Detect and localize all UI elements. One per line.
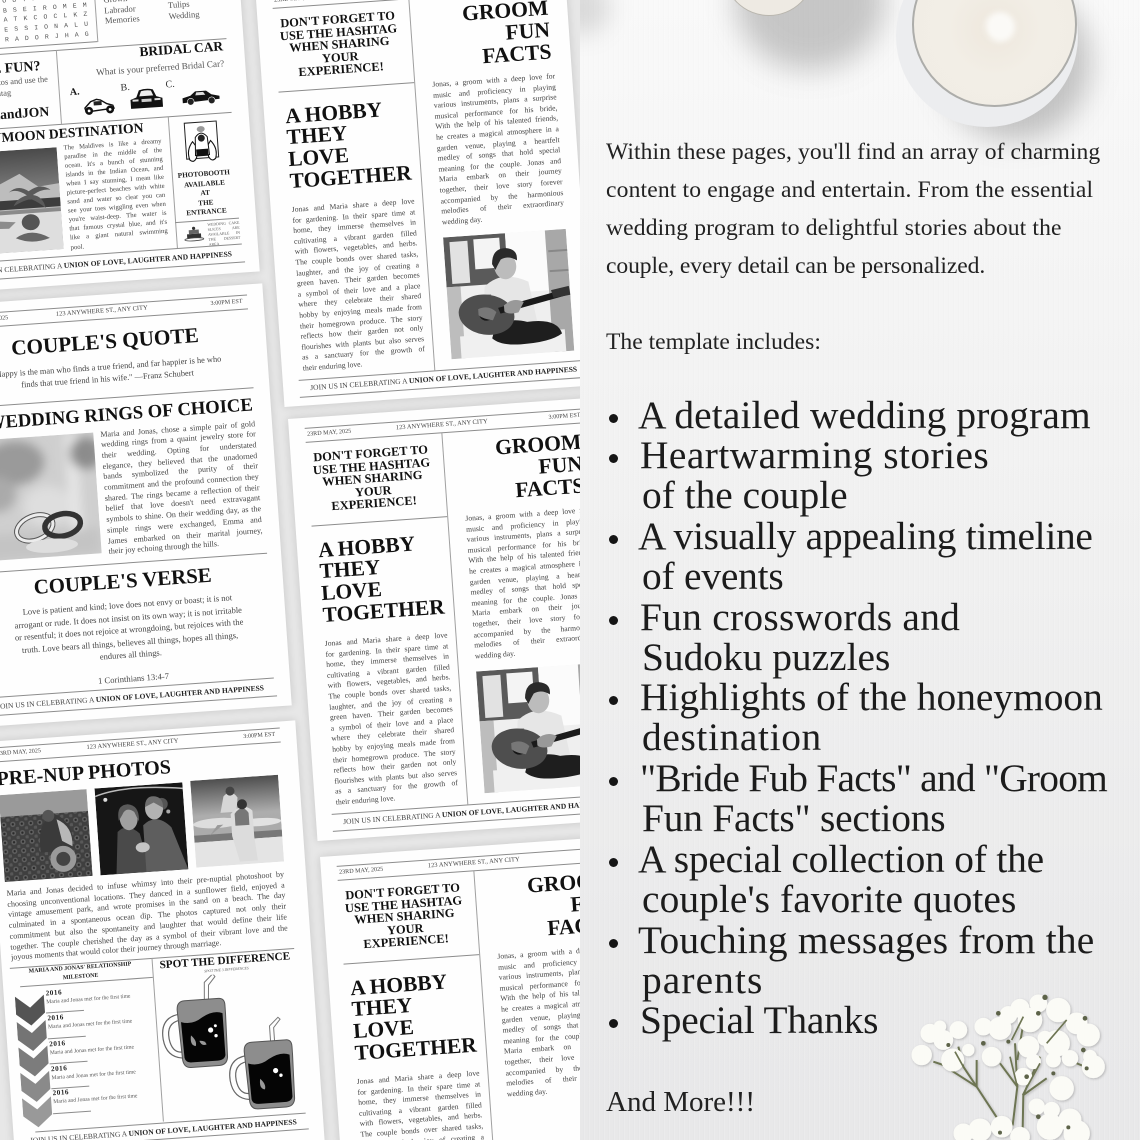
hobby paragraph: a symbol of their love and a place [330,715,454,733]
footer line: JOIN US IN CELEBRATING A UNION OF LOVE, LAUGHTER AND HAPPINESS [0,683,264,710]
bullet list of template contents: A special collection of the [638,837,1044,881]
icon: right candle glass [896,0,1078,127]
wedding cake note [207,220,240,247]
groom fun facts heading: FACTS [481,39,552,68]
milestone text 1: Maria and Jonas met for the first time [46,994,131,1005]
milestone text 4: Maria and Jonas met for the first time [51,1069,136,1081]
icon: wedding cake [184,226,204,242]
bullet list of template contents: Fun Facts" sections [642,796,945,840]
honeymoon description: sand and water so clear you can [67,192,165,206]
a hobby heading: A HOBBY [317,531,416,562]
relationship timeline [14,988,138,1128]
groom fun facts heading: FACTS [514,473,585,502]
groom paragraph: garden venue, playing a heartfelt [436,135,560,152]
shadow: top-left blur [555,0,610,35]
bullet list of template contents: of the couple [642,473,848,517]
chevron arrow stack [14,994,52,1128]
hashtag reminder: EXPERIENCE! [298,60,384,80]
hashtag reminder: WHEN SHARING [322,468,423,489]
milestone year 5: 2016 [52,1088,69,1097]
hobby paragraph: with flowers, vegetables, and herbs. [359,1111,483,1128]
bridal car question: What is your preferred Bridal Car? [96,58,225,77]
pre-nup story: culminated in a spontaneous ocean dip. The photos captured not only their [9,902,286,930]
rings description: their wedding. Opting for understated [102,440,257,460]
intro paragraph: content to engage and entertain. From the essential [606,177,1093,203]
photobooth text: AVAILABLE [184,178,225,189]
a hobby heading: TOGETHER [322,594,445,627]
honeymoon description: pool. [70,243,84,251]
icon: modern sedan [130,88,163,109]
hobby paragraph: their enduring love. [303,359,363,372]
a hobby heading: THEY [351,993,413,1021]
rings description: bands symbolized the purity of their [103,461,258,481]
panel: couple's quote page [0,283,292,727]
hobby paragraph: for gardening. In their spare time at [292,207,416,225]
verse text: truth. Love bears all things, believes all things, hopes all things, [21,629,238,655]
bullet list of template contents: Highlights of the honeymoon [640,675,1103,719]
header address: 123 ANYWHERE ST., ANY CITY [428,856,520,869]
rings description: commitment and the profound connection they [104,472,259,492]
hashtag reminder: DON'T FORGET TO [345,880,460,902]
rings description: symbols to shine. On their wedding day, as the [106,504,261,524]
wedding cake note: AREA [209,242,220,247]
hobby paragraph: their homegrown produce. The story [333,747,456,764]
groom paragraph: accompanied by the harmonious [440,188,564,205]
header time: 3:00PM EST [243,732,275,740]
pre-nup story: Maria and Jonas decided to infuse whimsy into their pre-nuptial photoshoot by [6,870,284,898]
hashtag reminder: DON'T FORGET TO [280,8,395,30]
wedding cake note: THE DESSERT [208,236,240,242]
hashtag reminder [312,442,430,514]
hobby paragraph: cultivating a vibrant garden filled [327,662,450,680]
word list column two: Wedding [168,8,200,21]
verse text [14,592,244,662]
hobby paragraph: reflects how their garden not only [333,757,457,775]
groom paragraph [432,71,564,226]
hobby paragraph: laughter, and the joy of creating a [329,694,452,711]
groom paragraph: wedding day. [507,1086,548,1098]
bridal car heading: BRIDAL CAR [139,38,223,59]
header address: 123 ANYWHERE ST., ANY CITY [86,738,179,751]
pre-nup story: together. The couple cherished the day as a symbol of their vibrant love and the [10,923,288,951]
hobby paragraph: home, they immerse themselves in [326,652,449,669]
closing line: And More!!! [606,1086,755,1118]
intro paragraph [606,137,1106,287]
hashtag reminder: USE THE HASHTAG [312,455,430,477]
milestone year 2: 2016 [47,1013,64,1022]
verse text: endures all things. [99,647,162,662]
wedding cake note: WEDDING CAKE [207,220,239,226]
rings description: shared. The rings became a reflection of their [105,483,260,503]
honeymoon description: when I say stunning, I mean like [66,174,164,188]
quote text: finds that true friend in his wife." —Franz Schubert [21,368,194,389]
hobby paragraph: as a sanctuary for the growth of [335,778,458,796]
photo: wedding rings [0,432,102,560]
couple's verse heading: COUPLE'S VERSE [33,564,212,599]
honeymoon description: islands in the Indian Ocean, and [65,165,164,178]
icon: right candle wax [912,0,1077,107]
rings description: James embarked on their marital journey, [108,526,263,545]
milestone year 1: 2016 [45,988,62,997]
groom paragraph: medley of songs that hold special [437,145,561,163]
hobby paragraph: cultivating a vibrant garden filled [294,228,417,246]
groom paragraph: With the help of his talented friends, [435,114,558,131]
hobby paragraph: with flowers, vegetables, and herbs. [327,673,451,690]
icon: baby's breath flowers [880,980,1140,1140]
rings description: Maria and Jonas, chose a simple pair of gold [100,419,255,439]
a hobby heading: A HOBBY [284,97,383,128]
header address: 123 ANYWHERE ST., ANY CITY [396,418,488,431]
panel: puzzle, bridal car and honeymoon page [0,0,260,293]
hashtag reminder: DON'T FORGET TO [313,442,428,464]
groom paragraph: wedding day. [442,214,483,226]
honeymoon description: picture-perfect beaches with white [67,183,165,197]
pre-nup story: choosing unconventional locations. They danced in a sunflower field, enjoyed a [7,880,285,909]
hashtag reminder: WHEN SHARING [289,34,390,55]
groom paragraph: musical performance for his bride, [434,103,558,121]
option A label: A. [69,86,80,98]
groom fun facts heading [461,0,552,68]
icon: vintage car [84,98,115,115]
hobby paragraph: for gardening. In their spare time at [357,1079,481,1097]
hashtag reminder: WHEN SHARING [354,906,455,927]
a hobby heading: TOGETHER [354,1032,477,1065]
milestone heading [28,961,131,981]
hobby paragraph: their enduring love. [336,793,396,806]
a hobby heading: TOGETHER [289,160,412,193]
hashtag reminder: USE THE HASHTAG [279,21,397,43]
hobby paragraph: The couple bonds over shared tasks, [360,1121,483,1139]
icon: photobooth camera [184,120,220,162]
a hobby heading [349,969,477,1064]
hobby paragraph: green haven. Their garden becomes [297,270,420,288]
photo: couple at amusement park [94,782,188,876]
hobby paragraph [324,630,458,806]
bullet list of template contents: Heartwarming stories [640,433,989,477]
milestone year 3: 2016 [49,1039,66,1048]
groom paragraph: he creates a magical atmosphere in a [436,124,559,142]
photobooth text: THE [198,198,214,207]
shadow: right candle [940,0,1090,140]
groom paragraph [465,505,598,662]
rings description: their joy echoing through the hills. [108,539,219,556]
hashtag reminder: EXPERIENCE! [363,932,449,952]
groom fun facts heading: FUN [505,17,551,44]
hobby paragraph: The couple bonds over shared tasks, [295,249,418,267]
groom paragraph: various instruments, plans a surprise [434,92,557,110]
hobby paragraph: for gardening. In their spare time at [325,641,449,659]
groom paragraph [497,943,630,1100]
photobooth text: AT [200,189,210,197]
bullet list of template contents [606,393,1116,1043]
header time: 3:00PM EST [210,299,243,307]
groom paragraph: wedding day. [475,648,516,660]
photobooth text: PHOTOBOOTH [178,168,230,180]
intro paragraph: couple, every detail can be personalized. [606,253,985,279]
pre-nup story: commitment but also the spontaneity and laughter that would define their life [9,912,287,941]
header time: 3:00PM EST [548,413,581,421]
icon: muscle car [182,90,220,106]
bullet list of template contents: Touching messages from the [638,918,1094,962]
panel: groom fun facts page, bottom [320,835,659,1140]
groom paragraph: together, their love story forever [439,177,563,195]
hashtag reminder: EXPERIENCE! [331,494,417,514]
hobby paragraph: green haven. Their garden becomes [330,704,453,722]
bullet list of template contents: A detailed wedding program [638,393,1091,437]
hobby paragraph: with flowers, vegetables, and herbs. [294,239,418,256]
bullet list of template contents: Special Thanks [640,998,878,1042]
word search grid [0,0,95,45]
groom paragraph: Maria embark on their journey [439,166,562,184]
groom fun facts heading: GROOM [494,429,582,459]
hobby paragraph: cultivating a vibrant garden filled [359,1100,482,1118]
groom paragraph: music and proficiency in playing [433,82,556,99]
hobby paragraph: their homegrown produce. The story [300,313,423,330]
photo: island resort [0,147,64,254]
word list: Memories [105,13,140,26]
bullet list of template contents: Fun crosswords and [640,595,960,639]
bullet list of template contents: couple's favorite quotes [642,877,1016,921]
verse text: Love is patient and kind; love does not envy or boast; it is not [22,592,232,617]
illustration: jar mugs [162,974,296,1110]
pre-nup story [6,870,288,962]
a hobby heading [284,97,412,193]
a hobby heading: LOVE [352,1015,415,1043]
rings description [100,419,263,556]
verse text: or resentful; it does not rejoice at wrongdoing, but rejoices with the [15,617,244,642]
hobby paragraph: Jonas and Maria share a deep love [324,630,448,648]
bullet list of template contents: parents [642,958,763,1002]
template includes line: The template includes: [606,329,821,355]
bullet list of template contents: A visually appealing timeline [638,514,1093,558]
header date: 23RD MAY, 2025 [307,429,351,438]
verse text: arrogant or rude. It does not insist on its own way; it is not irritable [14,604,242,630]
icon: candle wick highlight [985,12,1015,42]
groom fun facts heading [526,868,617,940]
hashtag fun block [0,59,50,126]
photobooth text: ENTRANCE [186,207,227,218]
honeymoon description [63,137,168,251]
panel: textured white right side [580,0,1140,1140]
rings description: belief that love doesn't need extravagant [105,493,261,513]
bullet list of template contents: Sudoku puzzles [642,635,890,679]
honeymoon description: that famous crystal blue, and it's [69,219,167,233]
a hobby heading: LOVE [287,143,350,171]
milestone heading: MILESTONE [63,972,99,981]
word list column two [168,0,200,21]
a hobby heading: THEY [319,555,381,583]
groom paragraph: Jonas, a groom with a deep love for [432,71,555,89]
hobby paragraph [291,196,425,372]
groom fun facts heading [494,429,585,502]
hobby paragraph: flourishes with plants but also serves [334,768,457,785]
milestone text 5: Maria and Jonas met for the first time [53,1093,138,1105]
hobby paragraph: as a sanctuary for the growth of [302,344,425,362]
spot the difference heading: SPOT THE DIFFERENCE [159,950,290,971]
header address: 123 ANYWHERE ST., ANY CITY [56,304,148,318]
hobby paragraph [356,1068,484,1140]
hobby paragraph: flourishes with plants but also serves [301,334,424,351]
a hobby heading [317,531,446,627]
a hobby heading: THEY [286,121,348,149]
honeymoon description: you're waist-deep. The water is [68,210,167,224]
hashtag reminder [279,8,397,80]
photo: man playing guitar [476,662,607,793]
hobby paragraph: where they celebrate their shared [331,726,454,743]
verse citation: 1 Corinthians 13:4-7 [98,671,169,686]
hobby paragraph: laughter, and the joy of creating a [296,260,419,277]
hashtag reminder: YOUR [322,49,359,65]
hobby paragraph: where they celebrate their shared [298,292,421,309]
option C label: C. [165,79,175,90]
footer line: JOIN US IN CELEBRATING A UNION OF LOVE, LAUGHTER AND HAPPINESS [310,364,577,392]
panel: pre-nup photos page [0,720,325,1140]
pre-nup story: vintage amusement park, and wrote promises in the sand on a beach. The day [8,891,286,919]
hashtag reminder: YOUR [387,921,424,937]
bullet list of template contents: destination [642,715,822,759]
groom fun facts heading: FUN [538,451,584,478]
panel: newspaper pages collage [0,0,585,1140]
photo: couple on the beach [190,774,284,868]
groom paragraph: Jonas, a groom with a deep love for [465,505,585,523]
hobby paragraph: reflects how their garden not only [300,323,424,341]
milestone text 3: Maria and Jonas met for the first time [50,1044,134,1056]
spot the difference subtitle: SPOT THE 3 DIFFERENCES [204,966,249,973]
rings description: simple rings were exchanged, Emma and [107,515,262,535]
hobby paragraph: Jonas and Maria share a deep love [291,196,415,214]
wedding cake note: AVAILABLE IN [208,231,240,237]
hashtag reminder: YOUR [355,483,392,499]
pre-nup heading: PRE-NUP PHOTOS [0,756,172,790]
rings description: wedding rings from a quaint jewelry store for [101,429,256,449]
milestone year 4: 2016 [51,1064,68,1073]
hobby paragraph: home, they immerse themselves in [293,218,416,235]
icon: left candle [723,0,815,16]
honeymoon description: The Maldives is like a dreamy [63,137,162,151]
option B label: B. [120,82,130,94]
couple's quote heading: COUPLE'S QUOTE [10,323,199,360]
a hobby heading: LOVE [320,577,383,605]
intro paragraph: wedding program to delightful stories about the [606,215,1062,241]
hobby paragraph: Jonas and Maria share a deep love [356,1068,480,1086]
panel: groom fun facts page, middle [288,397,627,841]
header date: 23RD MAY, 2025 [339,867,383,876]
photo: sunflower field [0,789,92,882]
groom paragraph: melodies of their extraordinary [441,198,564,216]
hobby paragraph: hobby by enjoying meals made from [299,302,422,320]
intro paragraph: Within these pages, you'll find an array of charming [606,139,1100,165]
honeymoon description: ocean. It's a bunch of stunning [65,156,163,169]
a hobby heading: A HOBBY [349,969,448,1000]
honeymoon description: see your toes wiggling even when [68,201,166,215]
hobby paragraph: home, they immerse themselves in [358,1090,481,1107]
photobooth text [178,168,230,218]
word list [103,0,140,26]
hobby paragraph: a symbol of their love and a place [297,281,421,299]
photo: man playing guitar [443,229,574,360]
hashtag reminder: USE THE HASHTAG [344,893,462,915]
hobby paragraph: hobby by enjoying meals made from [332,736,455,754]
milestone text 2: Maria and Jonas met for the first time [48,1018,132,1030]
hashtag reminder [332,880,476,953]
honeymoon description: like a giant natural swimming [70,228,168,242]
hashtag instruction [0,75,48,99]
word list: Labrador [104,3,136,15]
panel: groom fun facts page, top [255,0,594,407]
wedding cake note: SLICES ARE [208,225,240,232]
bullet list of template contents: "Bride Fub Facts" and "Groom [640,756,1107,800]
groom paragraph: meaning for the couple. Jonas and [438,156,561,173]
hobby paragraph: The couple bonds over shared tasks, [328,683,451,701]
honeymoon description: paradise in the middle of the [64,146,162,160]
milestone heading: MARIA AND JONAS' RELATIONSHIP [28,961,131,975]
rings description: elegance, they believed that the unadorned [102,451,258,471]
bullet list of template contents: of events [642,554,784,598]
shadow: left candle [735,0,885,70]
pre-nup story: joyous moments that would color their journey through marriage. [11,938,222,962]
